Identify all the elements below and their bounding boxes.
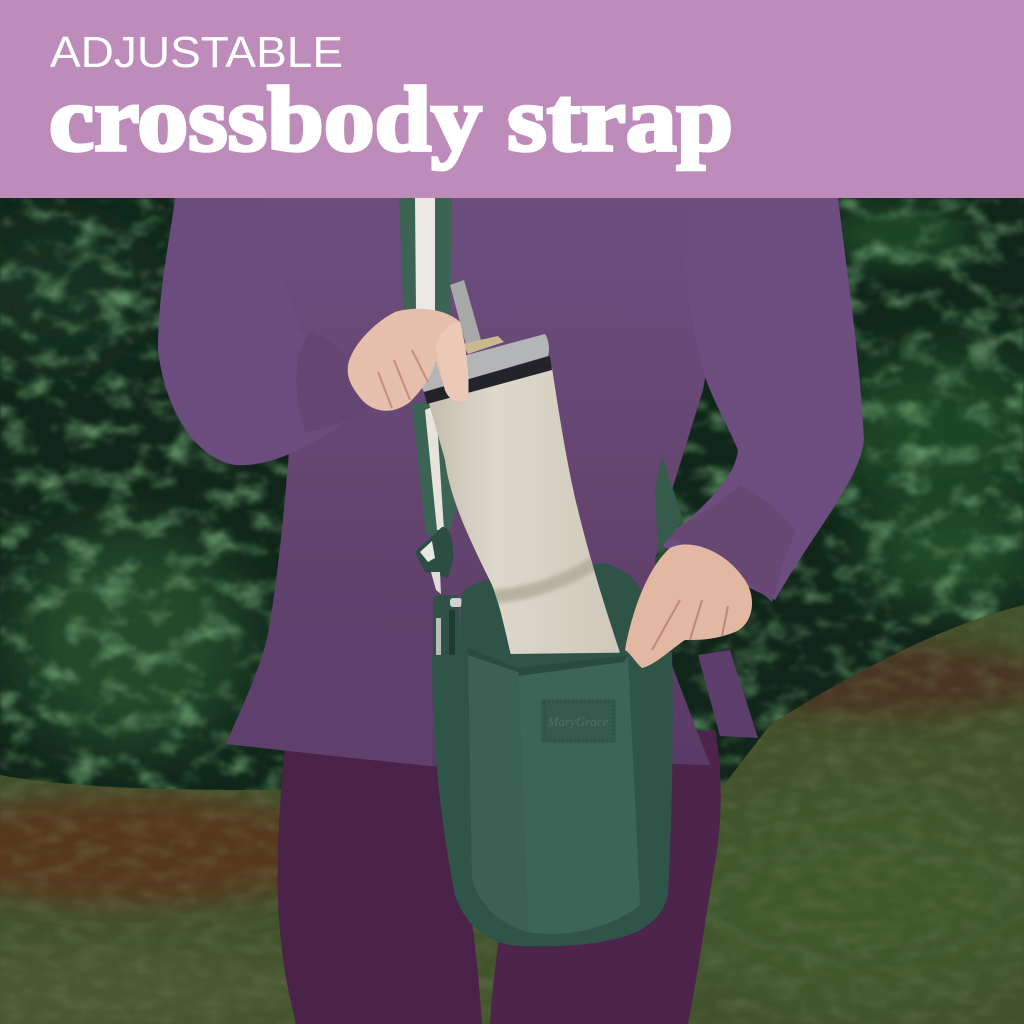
strap	[399, 198, 683, 668]
leggings	[278, 730, 721, 1024]
tumbler dark band	[424, 356, 552, 404]
bag front	[432, 648, 673, 946]
finger lines	[378, 350, 428, 408]
hand holding tumbler	[348, 309, 469, 411]
mesh pocket	[468, 655, 528, 932]
sweater pocket flap	[698, 650, 758, 738]
tumbler lid	[418, 334, 549, 392]
cuff: viewer right	[662, 485, 795, 602]
heading line: adjustable: ADJUSTABLE	[50, 28, 343, 77]
sleeve: viewer left arm	[158, 198, 375, 465]
sleeve: viewer right arm	[660, 198, 864, 600]
tumbler step shading	[494, 557, 594, 605]
straw	[450, 280, 481, 345]
hand at bag	[625, 545, 752, 668]
lid top	[462, 336, 504, 354]
sweater hem band	[226, 622, 432, 766]
zipper column	[433, 595, 462, 668]
bag center panel	[518, 656, 640, 934]
tumbler	[418, 280, 621, 660]
heading line: crossbody strap: crossbody strap	[49, 68, 733, 170]
bag back panel	[458, 563, 646, 665]
thumb	[436, 322, 469, 402]
tumbler body	[428, 368, 621, 660]
cuff: viewer left	[296, 330, 378, 432]
bag top pocket edge	[468, 648, 628, 676]
logo patch: MaryGrace	[547, 714, 609, 729]
sweater torso	[226, 198, 712, 766]
logo patch	[541, 699, 616, 743]
strap loop and buckle	[415, 527, 453, 594]
title banner	[0, 0, 1024, 198]
